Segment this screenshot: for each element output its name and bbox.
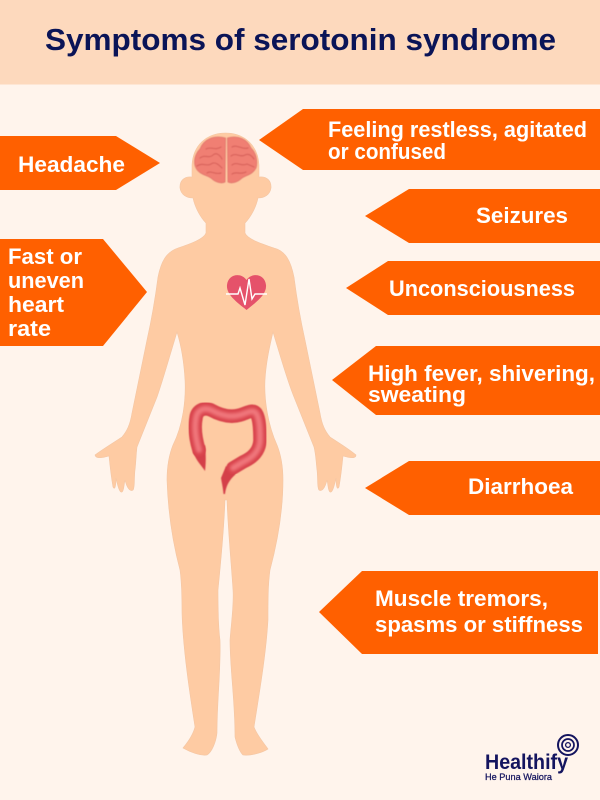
- callout: muscle tremors: [319, 571, 598, 654]
- icon: logo spiral: [558, 735, 578, 755]
- header band: [0, 0, 600, 84]
- callout: high fever: High fever, shivering,: [368, 361, 595, 386]
- callout: fast or uneven heart rate: uneven: [8, 268, 84, 293]
- logo: Healthify: [485, 735, 578, 782]
- icon: large intestine: [193, 409, 260, 494]
- callout: fast or uneven heart rate: Fast or: [8, 244, 82, 269]
- callout: diarrhoea: Diarrhoea: [468, 474, 574, 499]
- callout: fast or uneven heart rate: [0, 239, 147, 346]
- callout: muscle tremors: spasms or stiffness: [375, 612, 583, 637]
- callout: diarrhoea: [365, 461, 600, 515]
- callout: feeling restless: or confused: [328, 139, 446, 164]
- callout: unconsciousness: Unconsciousness: [389, 276, 575, 301]
- callout: feeling restless: [259, 109, 600, 170]
- logo: Healthify: Healthify: [485, 751, 568, 774]
- title: Symptoms of serotonin syndrome: [45, 22, 556, 57]
- icon: brain: [195, 137, 257, 183]
- logo: Healthify: He Puna Waiora: [485, 772, 552, 782]
- callout: muscle tremors: Muscle tremors,: [375, 586, 548, 611]
- callout: high fever: [332, 346, 600, 415]
- callout: fast or uneven heart rate: rate: [8, 316, 51, 341]
- icon: heart with pulse: [226, 275, 267, 310]
- callout: feeling restless: Feeling restless, agitated: [328, 117, 587, 142]
- callout: seizures: [365, 189, 600, 243]
- callout: headache: Headache: [18, 152, 125, 177]
- callout: headache: [0, 136, 160, 190]
- callout: high fever: sweating: [368, 382, 466, 407]
- body silhouette: [95, 133, 356, 755]
- callout: seizures: Seizures: [476, 203, 568, 228]
- callout: fast or uneven heart rate: heart: [8, 292, 65, 317]
- callout: unconsciousness: [346, 261, 600, 315]
